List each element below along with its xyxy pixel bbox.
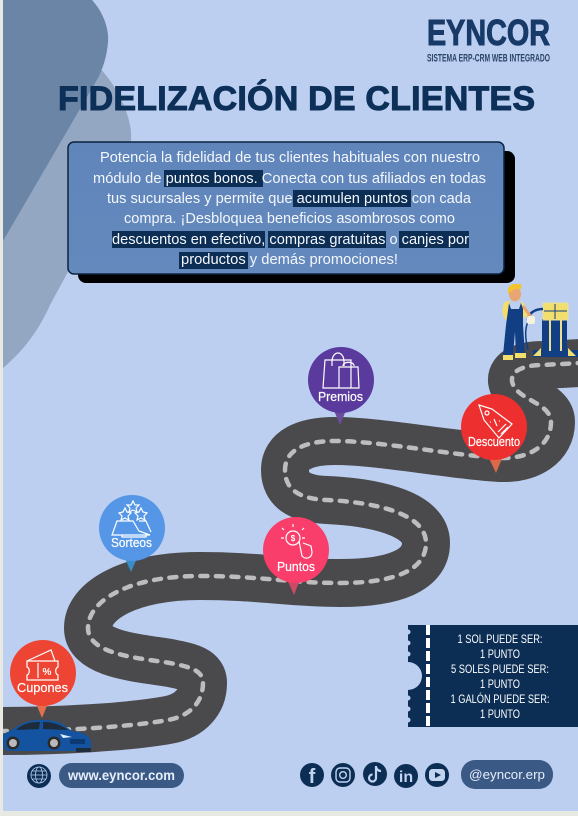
pin: Puntos: Puntos — [277, 559, 315, 574]
icon: facebook — [300, 763, 324, 788]
ticket: points equivalence: 1 PUNTO — [480, 677, 520, 691]
icon: coin and tapping hand — [281, 524, 312, 558]
icon: tiktok — [363, 762, 387, 786]
decorative corner shapes — [3, 0, 131, 368]
panel: introduction: compra. ¡Desbloquea beneficios asombrosos como — [124, 211, 455, 227]
pin: Cupones: % — [43, 667, 52, 678]
logo: EYNCOR — [427, 12, 550, 53]
icon: globe — [27, 764, 51, 788]
panel: introduction: tus sucursales y permite que acumulen puntos con cada — [107, 191, 472, 207]
icon: linkedin — [394, 764, 418, 788]
panel: introduction: módulo de puntos bonos. Conecta con tus afiliados en todas — [93, 171, 486, 187]
panel: introduction: descuentos en efectivo, compras gratuitas o canjes por — [112, 232, 469, 248]
pin: Cupones: Cupones — [17, 680, 68, 695]
ticket: points equivalence: 1 SOL PUEDE SER: — [458, 632, 542, 646]
pin: Puntos — [263, 517, 329, 595]
icon: shopping bags — [323, 353, 359, 388]
ticket: points equivalence: 1 PUNTO — [480, 707, 520, 721]
social handle pill: @eyncor.erp — [469, 767, 545, 782]
icon: facebook: f — [309, 766, 316, 788]
logo — [427, 12, 550, 64]
icon: youtube — [425, 763, 449, 787]
icon: coupon ticket — [27, 650, 58, 680]
pin: Sorteos: Sorteos — [111, 535, 152, 550]
pin: Premios — [308, 347, 374, 425]
icon: blue car — [3, 720, 91, 752]
ticket: points equivalence: 5 SOLES PUEDE SER: — [451, 662, 549, 676]
icon: linkedin: in — [399, 769, 413, 786]
pin: Premios: Premios — [318, 389, 363, 404]
pin: Puntos: $ — [291, 534, 296, 543]
pin: Sorteos — [99, 495, 165, 572]
pin: Cupones — [10, 640, 76, 718]
ticket: points equivalence: 1 PUNTO — [480, 647, 520, 661]
icon: worker at fuel pump — [502, 284, 578, 360]
ticket: points equivalence: 1 GALÓN PUEDE SER: — [450, 691, 550, 706]
icon: price tag — [479, 405, 512, 438]
ticket: points equivalence — [406, 625, 578, 727]
pin: Descuento: Descuento — [468, 434, 520, 449]
social icons — [300, 762, 449, 788]
pin: Descuento — [461, 394, 527, 473]
panel: introduction — [68, 142, 515, 283]
website pill: www.eyncor.com — [67, 768, 175, 783]
website pill — [59, 763, 184, 788]
icon: instagram — [331, 763, 355, 787]
title: FIDELIZACIÓN DE CLIENTES — [58, 80, 535, 118]
panel: introduction: Potencia la fidelidad de tus clientes habituales con nuestro — [100, 150, 480, 166]
panel: introduction: productos y demás promociones! — [181, 252, 398, 268]
icon: gift box with stars — [112, 501, 151, 537]
social handle pill — [461, 760, 553, 789]
road — [0, 363, 578, 731]
